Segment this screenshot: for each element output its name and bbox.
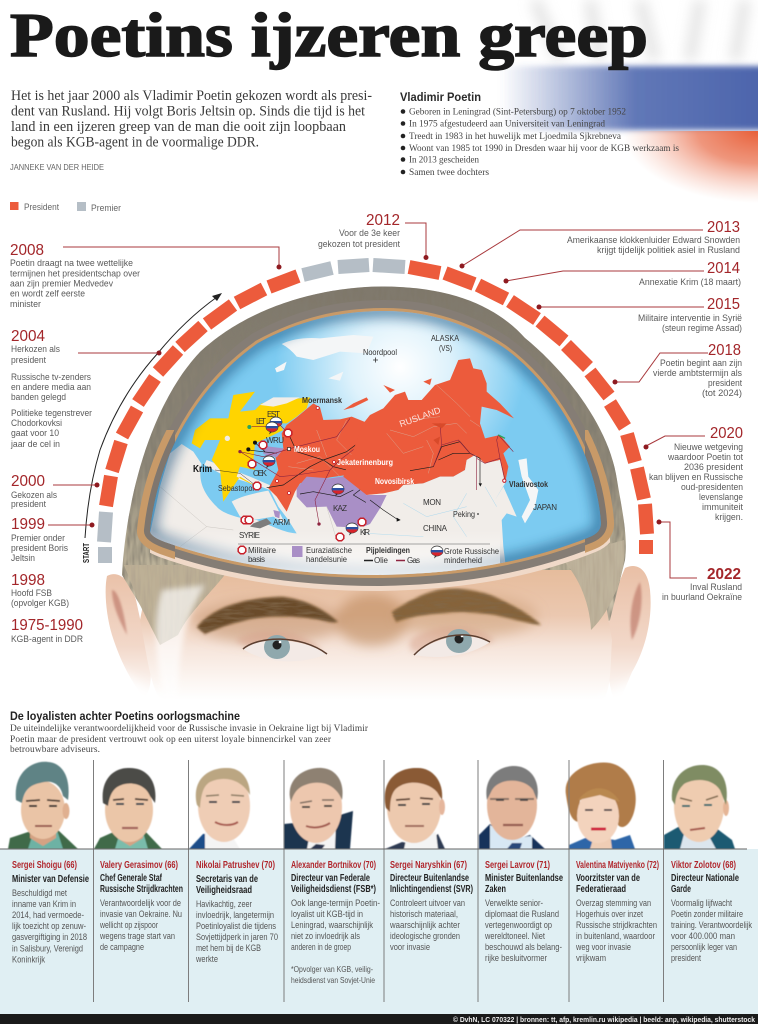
- section heading: loyalists: De loyalisten achter Poetins oorlogsmachine: [10, 709, 240, 723]
- portrait: Zolotov: [664, 765, 735, 849]
- timeline 1998: (opvolger KGB): [11, 598, 69, 608]
- biography box: Geboren in Leningrad (Sint-Petersburg) op 7 oktober 1952: [409, 106, 626, 118]
- profile: Sergei Shoigu: Beschuldigd met: [12, 888, 67, 899]
- white highlight on temple: [156, 585, 205, 700]
- timeline 2004: Herkozen als: [11, 344, 61, 354]
- map labels: WRU: [266, 436, 284, 445]
- profile: Nikolai Patrushev: met hem bij de KGB: [196, 943, 261, 954]
- timeline 2020: 2020: [710, 425, 743, 442]
- timeline 2000: president: [11, 499, 47, 509]
- timeline 1975-1990: 1975-1990: [11, 617, 83, 634]
- profile: Alexander Bortnikov: Leningrad, waarschijnlijk: [291, 920, 373, 931]
- timeline 2015: 2015: [707, 296, 740, 313]
- profile: Sergei Naryshkin: ideologische gronden: [390, 931, 460, 942]
- map labels: CHINA: [423, 524, 448, 533]
- profile: Sergei Shoigu: Koninkrijk: [12, 954, 45, 966]
- timeline 2013: [460, 219, 740, 268]
- start label: START: [81, 542, 91, 563]
- map labels: OEK: [253, 469, 268, 478]
- timeline 2000: 2000: [11, 473, 45, 490]
- profile: Alexander Bortnikov: Veiligheidsdienst (FSB*): [291, 884, 376, 895]
- right half of map: [343, 358, 538, 573]
- inner shadow: [150, 311, 601, 575]
- profile: Sergei Shoigu: Minister van Defensie: [12, 874, 89, 885]
- profile: Sergei Naryshkin: Directeur Buitenlandse: [390, 873, 469, 884]
- biography box: In 2013 gescheiden: [409, 156, 479, 166]
- profile: Sergei Lavrov: diplomaat die Rusland: [485, 909, 559, 920]
- map legend: handelsunie: [306, 555, 348, 564]
- timeline 2000: Gekozen als: [11, 490, 58, 500]
- map labels: Moskou: [294, 444, 320, 454]
- intro text: Het is het jaar 2000 als Vladimir Poetin gekozen wordt als presi-: [11, 88, 372, 104]
- section intro: betrouwbare adviseurs.: [10, 745, 100, 755]
- profile: Sergei Shoigu: inname van Krim in: [12, 899, 76, 910]
- column dividers: [0, 760, 747, 1002]
- profile: Viktor Zolotov: Garde: [671, 884, 691, 895]
- timeline 2012: Voor de 3e keer: [339, 228, 400, 238]
- timeline ring segments: [104, 265, 647, 563]
- timeline 2013: 2013: [707, 219, 740, 236]
- map legend: Olie: [374, 556, 389, 565]
- map labels: KIR: [360, 528, 370, 537]
- timeline 1999: Premier onder: [11, 533, 65, 543]
- profile: Sergei Lavrov: rijke besluitvormer: [485, 953, 548, 964]
- profile: Valentina Matviyenko: Voorzitster van de: [576, 873, 640, 884]
- timeline 2020: krijgen.: [715, 512, 743, 522]
- profile: Alexander Bortnikov: niet zo invloedrijk als: [291, 931, 360, 942]
- profile: Sergei Naryshkin: [389, 860, 473, 953]
- map legend: Grote Russische: [444, 547, 500, 556]
- timeline 2004: Politieke tegenstrever: [11, 408, 92, 418]
- portrait: Naryshkin: [385, 768, 445, 849]
- profile: Viktor Zolotov: [671, 860, 752, 964]
- eye left: [235, 631, 327, 661]
- profile: Sergei Shoigu: [12, 860, 89, 966]
- profile: Valentina Matviyenko: Federatieraad: [576, 884, 626, 895]
- portrait: Bortnikov: [284, 768, 353, 849]
- profile: Valery Gerasimov: Russische Strijdkrachten: [100, 884, 183, 895]
- left half of map: [150, 335, 473, 587]
- profile: Nikolai Patrushev: Havikachtig, zeer: [196, 899, 253, 910]
- timeline 1998: [11, 572, 69, 608]
- eye right: [410, 627, 495, 657]
- map of Russia and surroundings: [150, 311, 601, 575]
- profile: Sergei Lavrov: Verwelkte senior-: [485, 898, 543, 909]
- map legend: minderheid: [444, 556, 482, 565]
- timeline 2004: president: [11, 355, 47, 365]
- intro text: land in een ijzeren greep van de man die ooit zijn loopbaan: [11, 119, 346, 135]
- profile: Sergei Lavrov: [484, 860, 563, 964]
- byline: JANNEKE VAN DER HEIDE: [10, 162, 104, 172]
- profile: Sergei Lavrov: Minister Buitenlandse: [485, 873, 563, 884]
- bottom fade: [152, 534, 500, 575]
- profile: Viktor Zolotov: president: [671, 953, 701, 964]
- profile: Nikolai Patrushev: Sovjettijdperk in jaren 70: [196, 932, 278, 943]
- profile: Sergei Naryshkin: historisch materiaal,: [390, 909, 458, 920]
- timeline 2022: [656, 520, 742, 602]
- timeline 2015: Militaire interventie in Syrië: [638, 313, 742, 323]
- portrait: Gerasimov: [94, 768, 162, 849]
- profile: Viktor Zolotov: Viktor Zolotov (68): [671, 860, 736, 871]
- biography box: [400, 92, 679, 178]
- map labels: Peking: [453, 510, 475, 519]
- biography box: Woont van 1985 tot 1990 in Dresden waar hij voor de KGB werkzaam is: [409, 144, 679, 154]
- timeline 1999: president Boris: [11, 543, 69, 553]
- profile: Valery Gerasimov: Chef Generale Staf: [100, 873, 162, 884]
- profile: Viktor Zolotov: voor 400.000 man: [671, 931, 735, 942]
- timeline 2004: Chodorkovksi: [11, 418, 62, 428]
- section intro: De uiteindelijke verantwoordelijkheid voor de Russische invasie in Oekraine ligt bij Vladimir: [10, 724, 369, 734]
- timeline 2012: [318, 212, 428, 260]
- timeline 2004: 2004: [11, 328, 45, 345]
- section intro: Poetin maar de president vertrouwt ook op een uiterst loyale binnencirkel van zeer: [10, 735, 332, 745]
- side hair lower left: [124, 565, 232, 645]
- title: Poetins ijzeren greep: [10, 2, 648, 70]
- map labels: JAPAN: [533, 503, 557, 512]
- timeline 1999: 1999: [11, 516, 45, 533]
- map legend: basis: [248, 555, 265, 564]
- side hair lower right: [560, 540, 625, 630]
- timeline 2018: president: [708, 378, 742, 388]
- section intro: [10, 724, 369, 755]
- timeline 2015: [536, 296, 742, 333]
- profile: Viktor Zolotov: persoonlijk leger van: [671, 942, 737, 953]
- lower face fade: [90, 665, 670, 715]
- timeline 1975-1990: [11, 617, 83, 644]
- map labels: SYRIE: [239, 531, 260, 540]
- timeline 2014: [504, 260, 741, 287]
- timeline 2004: Russische tv-zenders: [11, 372, 92, 382]
- profile: Valery Gerasimov: wegens trage start van: [99, 931, 175, 942]
- arrow: timeline direction: [85, 293, 222, 538]
- map labels: EST: [267, 410, 280, 419]
- map labels: ALASKA: [431, 334, 460, 343]
- map labels: Noordpool: [363, 348, 397, 357]
- profile: Nikolai Patrushev: Secretaris van de: [196, 874, 258, 885]
- portrait: Patrushev: [189, 768, 250, 849]
- face: [140, 570, 612, 706]
- profile: Alexander Bortnikov: Ook lange-termijn Poetin-: [291, 898, 380, 909]
- timeline 2013: Amerikaanse klokkenluider Edward Snowden: [567, 235, 740, 245]
- profile: Nikolai Patrushev: invloedrijk, langetermijn: [196, 910, 274, 921]
- timeline 2012: 2012: [366, 212, 400, 229]
- timeline 1999: Jeltsin: [11, 553, 35, 563]
- profile: Sergei Shoigu: gasvergiftiging in 2018: [12, 932, 87, 943]
- biography box: Samen twee dochters: [409, 168, 489, 178]
- timeline 2000: [11, 473, 100, 509]
- timeline 2020: Nieuwe wetgeving: [674, 442, 743, 452]
- timeline 2008: [10, 242, 282, 309]
- map labels: KAZ: [333, 504, 347, 513]
- map legend: Militaire: [248, 546, 277, 555]
- portrait: Lavrov: [479, 766, 545, 849]
- biography box: In 1975 afgestudeerd aan Universiteit van Leningrad: [409, 118, 605, 130]
- timeline 2018: 2018: [708, 342, 741, 359]
- timeline 2018: Poetin begint aan zijn: [660, 358, 742, 368]
- profile: Sergei Naryshkin: Sergei Naryshkin (67): [390, 860, 467, 871]
- profile: Alexander Bortnikov: *Opvolger van KGB, veilig-: [291, 965, 373, 974]
- map labels: Jekaterinenburg: [337, 457, 393, 467]
- map labels: (VS): [439, 344, 452, 353]
- legend: president / premier: Premier: [91, 203, 121, 213]
- map labels: Krim: [193, 464, 212, 475]
- profile: Sergei Shoigu: in Salisbury, Verenigd: [12, 944, 83, 954]
- timeline 2018: [612, 342, 743, 398]
- profile: Valentina Matviyenko: [575, 860, 659, 964]
- portraits row: [8, 762, 735, 849]
- profile: Sergei Naryshkin: voor invasie: [390, 942, 430, 953]
- profile: Sergei Naryshkin: Inlichtingendienst (SVR): [390, 884, 473, 895]
- profile: Valery Gerasimov: wellicht op zijspoor: [99, 920, 159, 931]
- timeline 2008: termijnen het presidentschap over: [10, 268, 140, 278]
- profile: Valentina Matviyenko: Overzag stemming van: [576, 898, 651, 909]
- map labels: Vladivostok: [509, 480, 548, 489]
- timeline 2008: minister: [10, 299, 41, 309]
- profile: Nikolai Patrushev: Nikolai Patrushev (70): [196, 860, 275, 871]
- profile: Alexander Bortnikov: [291, 860, 380, 985]
- timeline 2008: 2008: [10, 242, 44, 259]
- map labels: RUSLAND: [398, 405, 442, 429]
- profile: Alexander Bortnikov: heidsdienst van Sovjet-Unie: [291, 976, 375, 985]
- profile: Valery Gerasimov: invasie van Oekraine. Nu: [100, 909, 182, 920]
- map legend: Euraziatische: [306, 546, 353, 555]
- portrait: Shoigu: [8, 762, 78, 849]
- profile: Alexander Bortnikov: Directeur van Federale: [291, 873, 370, 884]
- timeline 2020: [644, 425, 744, 522]
- profile: Viktor Zolotov: Voormalig lijfwacht: [671, 898, 732, 909]
- head: hair, face, ears, eyes: [90, 287, 670, 715]
- timeline 2018: (tot 2024): [702, 388, 742, 398]
- timeline 2020: 2036 president: [684, 462, 744, 472]
- flag background: Russian tricolour: [500, 0, 758, 211]
- profile: Sergei Lavrov: wereldtoneel. Niet: [484, 931, 545, 942]
- profile: Nikolai Patrushev: werkte: [195, 954, 218, 965]
- map legend: Gas: [407, 556, 420, 565]
- map legend: [238, 544, 500, 565]
- map labels: LET: [256, 417, 266, 426]
- biography box: Treedt in 1983 in het huwelijk met Ljoedmila Sjkrebneva: [409, 132, 622, 142]
- timeline 2020: kan blijven en Russische: [649, 472, 743, 482]
- timeline 2020: levenslange: [699, 492, 743, 502]
- timeline 2014: Annexatie Krim (18 maart): [639, 277, 741, 287]
- intro text: begon als KGB-agent in de voormalige DDR.: [11, 134, 259, 150]
- profile: Sergei Lavrov: Zaken: [485, 884, 506, 895]
- timeline 2004: [10, 328, 162, 449]
- profile: Alexander Bortnikov: loyalist uit KGB-tijd in: [291, 909, 363, 920]
- map legend: Pijpleidingen: [366, 546, 410, 555]
- map labels: Moermansk: [302, 396, 342, 405]
- profile: Valery Gerasimov: [99, 860, 183, 953]
- timeline 2020: immuniteit: [702, 502, 744, 512]
- timeline 2020: waardoor Poetin tot: [667, 452, 744, 462]
- timeline 2004: banden gelegd: [11, 392, 66, 402]
- timeline 2004: en andere media aan: [11, 382, 91, 392]
- map labels: MON: [423, 498, 441, 507]
- timeline 1975-1990: KGB-agent in DDR: [11, 634, 83, 644]
- panel: biographies background: [0, 849, 758, 1014]
- eyebrow left: [197, 597, 338, 634]
- profile: Sergei Shoigu: Sergei Shoigu (66): [12, 860, 77, 871]
- timeline 2004: gaat voor 10: [11, 428, 59, 438]
- timeline 2008: aan zijn premier Medvedev: [10, 278, 114, 288]
- timeline 2008: en wordt zelf eerste: [10, 288, 85, 298]
- timeline 2020: oud-presidenten: [681, 482, 743, 492]
- timeline 2015: (steun regime Assad): [662, 323, 742, 333]
- profile: Valentina Matviyenko: in buitenland, waardoor: [576, 931, 656, 942]
- profile: Sergei Naryshkin: Controleert uitvoer van: [390, 898, 465, 909]
- portrait: Matviyenko: [566, 763, 636, 849]
- timeline 2004: jaar de cel in: [10, 439, 60, 449]
- intro text: [11, 88, 372, 150]
- timeline 1998: 1998: [11, 572, 45, 589]
- profile: Valery Gerasimov: Verantwoordelijk voor de: [100, 898, 181, 909]
- map labels: [193, 334, 557, 540]
- profile: Valentina Matviyenko: Hogerhuis over inzet: [576, 909, 643, 920]
- profile: Sergei Lavrov: vertegenwoordigt op: [485, 920, 552, 931]
- profile: Valentina Matviyenko: vrijkwam: [576, 953, 606, 964]
- profile: Sergei Shoigu: 2014, had vermoede-: [12, 910, 84, 921]
- timeline 2018: vierde ambtstermijn als: [653, 368, 743, 378]
- profile: Nikolai Patrushev: Poetinloyalist die tijdens: [196, 921, 276, 932]
- timeline 2013: krijgt tijdelijk politiek asiel in Rusland: [597, 245, 740, 255]
- map labels: Sebastopol: [218, 484, 254, 493]
- legend: president / premier: President: [24, 202, 59, 212]
- timeline 1999: [11, 516, 94, 563]
- hair: [122, 287, 626, 640]
- timeline 2008: Poetin draagt na twee wettelijke: [10, 258, 133, 268]
- biography box: Vladimir Poetin: [400, 92, 481, 104]
- profile: Sergei Lavrov: Sergei Lavrov (71): [485, 860, 550, 871]
- map icons: Russian minority bubbles and military bases: [241, 406, 366, 541]
- profile: Valentina Matviyenko: weg voor invasie: [575, 942, 631, 953]
- profile: Nikolai Patrushev: Veiligheidsraad: [196, 885, 252, 896]
- profile: Alexander Bortnikov: anderen in de groep: [291, 942, 351, 953]
- timeline 2022: in buurland Oekraïne: [662, 592, 742, 602]
- timeline 2014: 2014: [707, 260, 740, 277]
- timeline 2022: Inval Rusland: [690, 582, 742, 592]
- profile: Alexander Bortnikov: Alexander Bortnikov (70): [291, 860, 376, 871]
- map labels: ARM: [273, 518, 290, 527]
- footer credits bar: [0, 1014, 758, 1024]
- profile: Valery Gerasimov: de campagne: [100, 942, 144, 953]
- ears: [106, 566, 651, 705]
- legend: president / premier: [10, 202, 121, 213]
- timeline 1998: Hoofd FSB: [11, 588, 52, 598]
- dome bezel: [150, 311, 601, 575]
- profile: Nikolai Patrushev: [195, 860, 278, 965]
- timeline 2022: 2022: [707, 566, 741, 583]
- eyebrow right: [392, 589, 541, 625]
- intro text: dent van Rusland. Hij volgt Boris Jeltsin op. Sinds die tijd is het: [11, 104, 366, 120]
- profile: Valery Gerasimov: Valery Gerasimov (66): [100, 860, 178, 871]
- map labels: Novosibirsk: [375, 476, 414, 486]
- timeline 2012: gekozen tot president: [318, 239, 401, 249]
- brow and nose shading: [193, 594, 538, 646]
- profile: Valentina Matviyenko: Russische strijdkrachten: [576, 920, 657, 931]
- profile: Sergei Lavrov: beschouwd als belang-: [485, 942, 562, 953]
- profile: Sergei Naryshkin: waarschijnlijk achter: [389, 920, 461, 931]
- profile: Valentina Matviyenko: Valentina Matviyenko (72): [576, 860, 659, 871]
- profile: Sergei Shoigu: lijk toezicht op zenuw-: [12, 921, 86, 932]
